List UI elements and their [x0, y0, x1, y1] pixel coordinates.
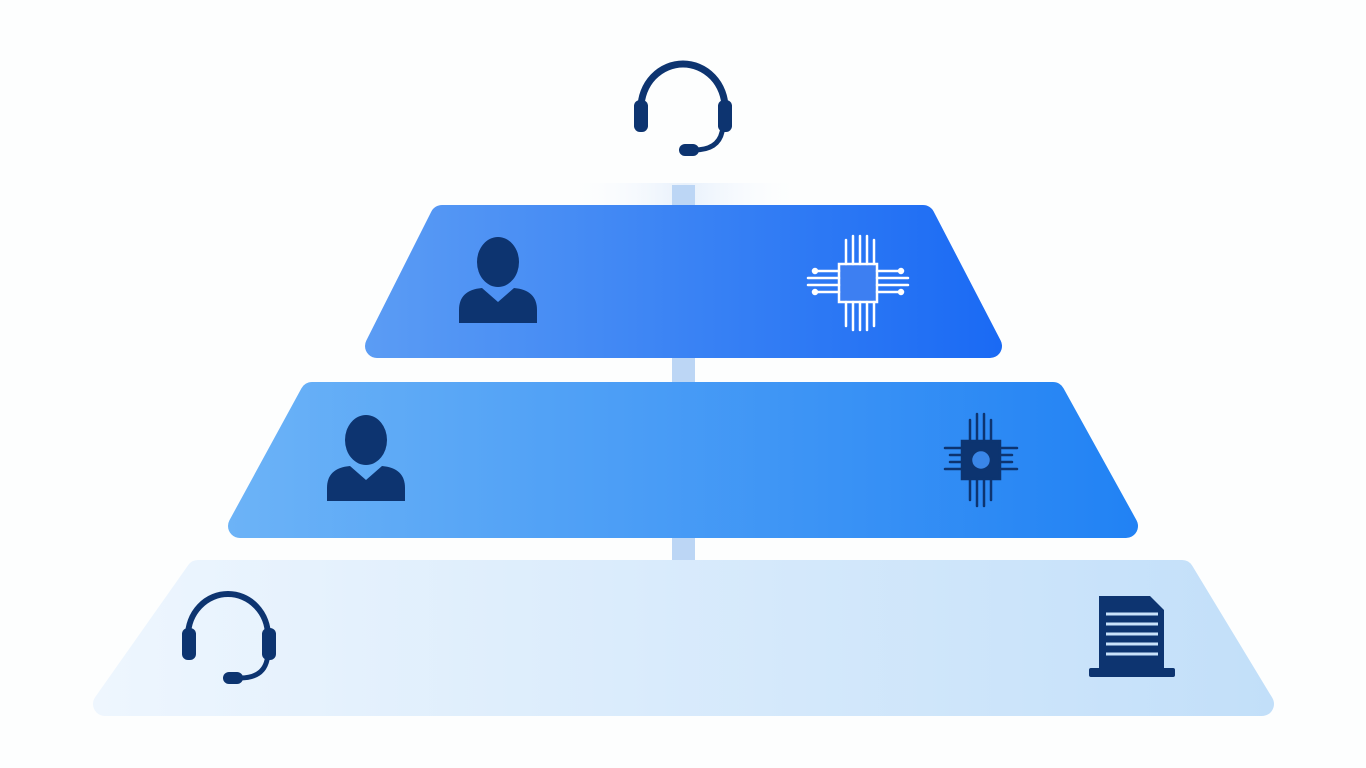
tier 3 (bottom) — [105, 572, 1262, 704]
tier 1 (top) — [377, 217, 990, 346]
icon: headset — [182, 594, 276, 684]
icon: chip navy — [945, 414, 1017, 506]
icon: top headset — [634, 64, 732, 156]
icon: document — [1089, 596, 1175, 677]
icon: person — [327, 415, 405, 501]
connector line — [560, 183, 810, 565]
icon: chip white — [808, 236, 908, 330]
icon: person — [459, 237, 537, 323]
tier 2 (middle) — [240, 394, 1126, 526]
